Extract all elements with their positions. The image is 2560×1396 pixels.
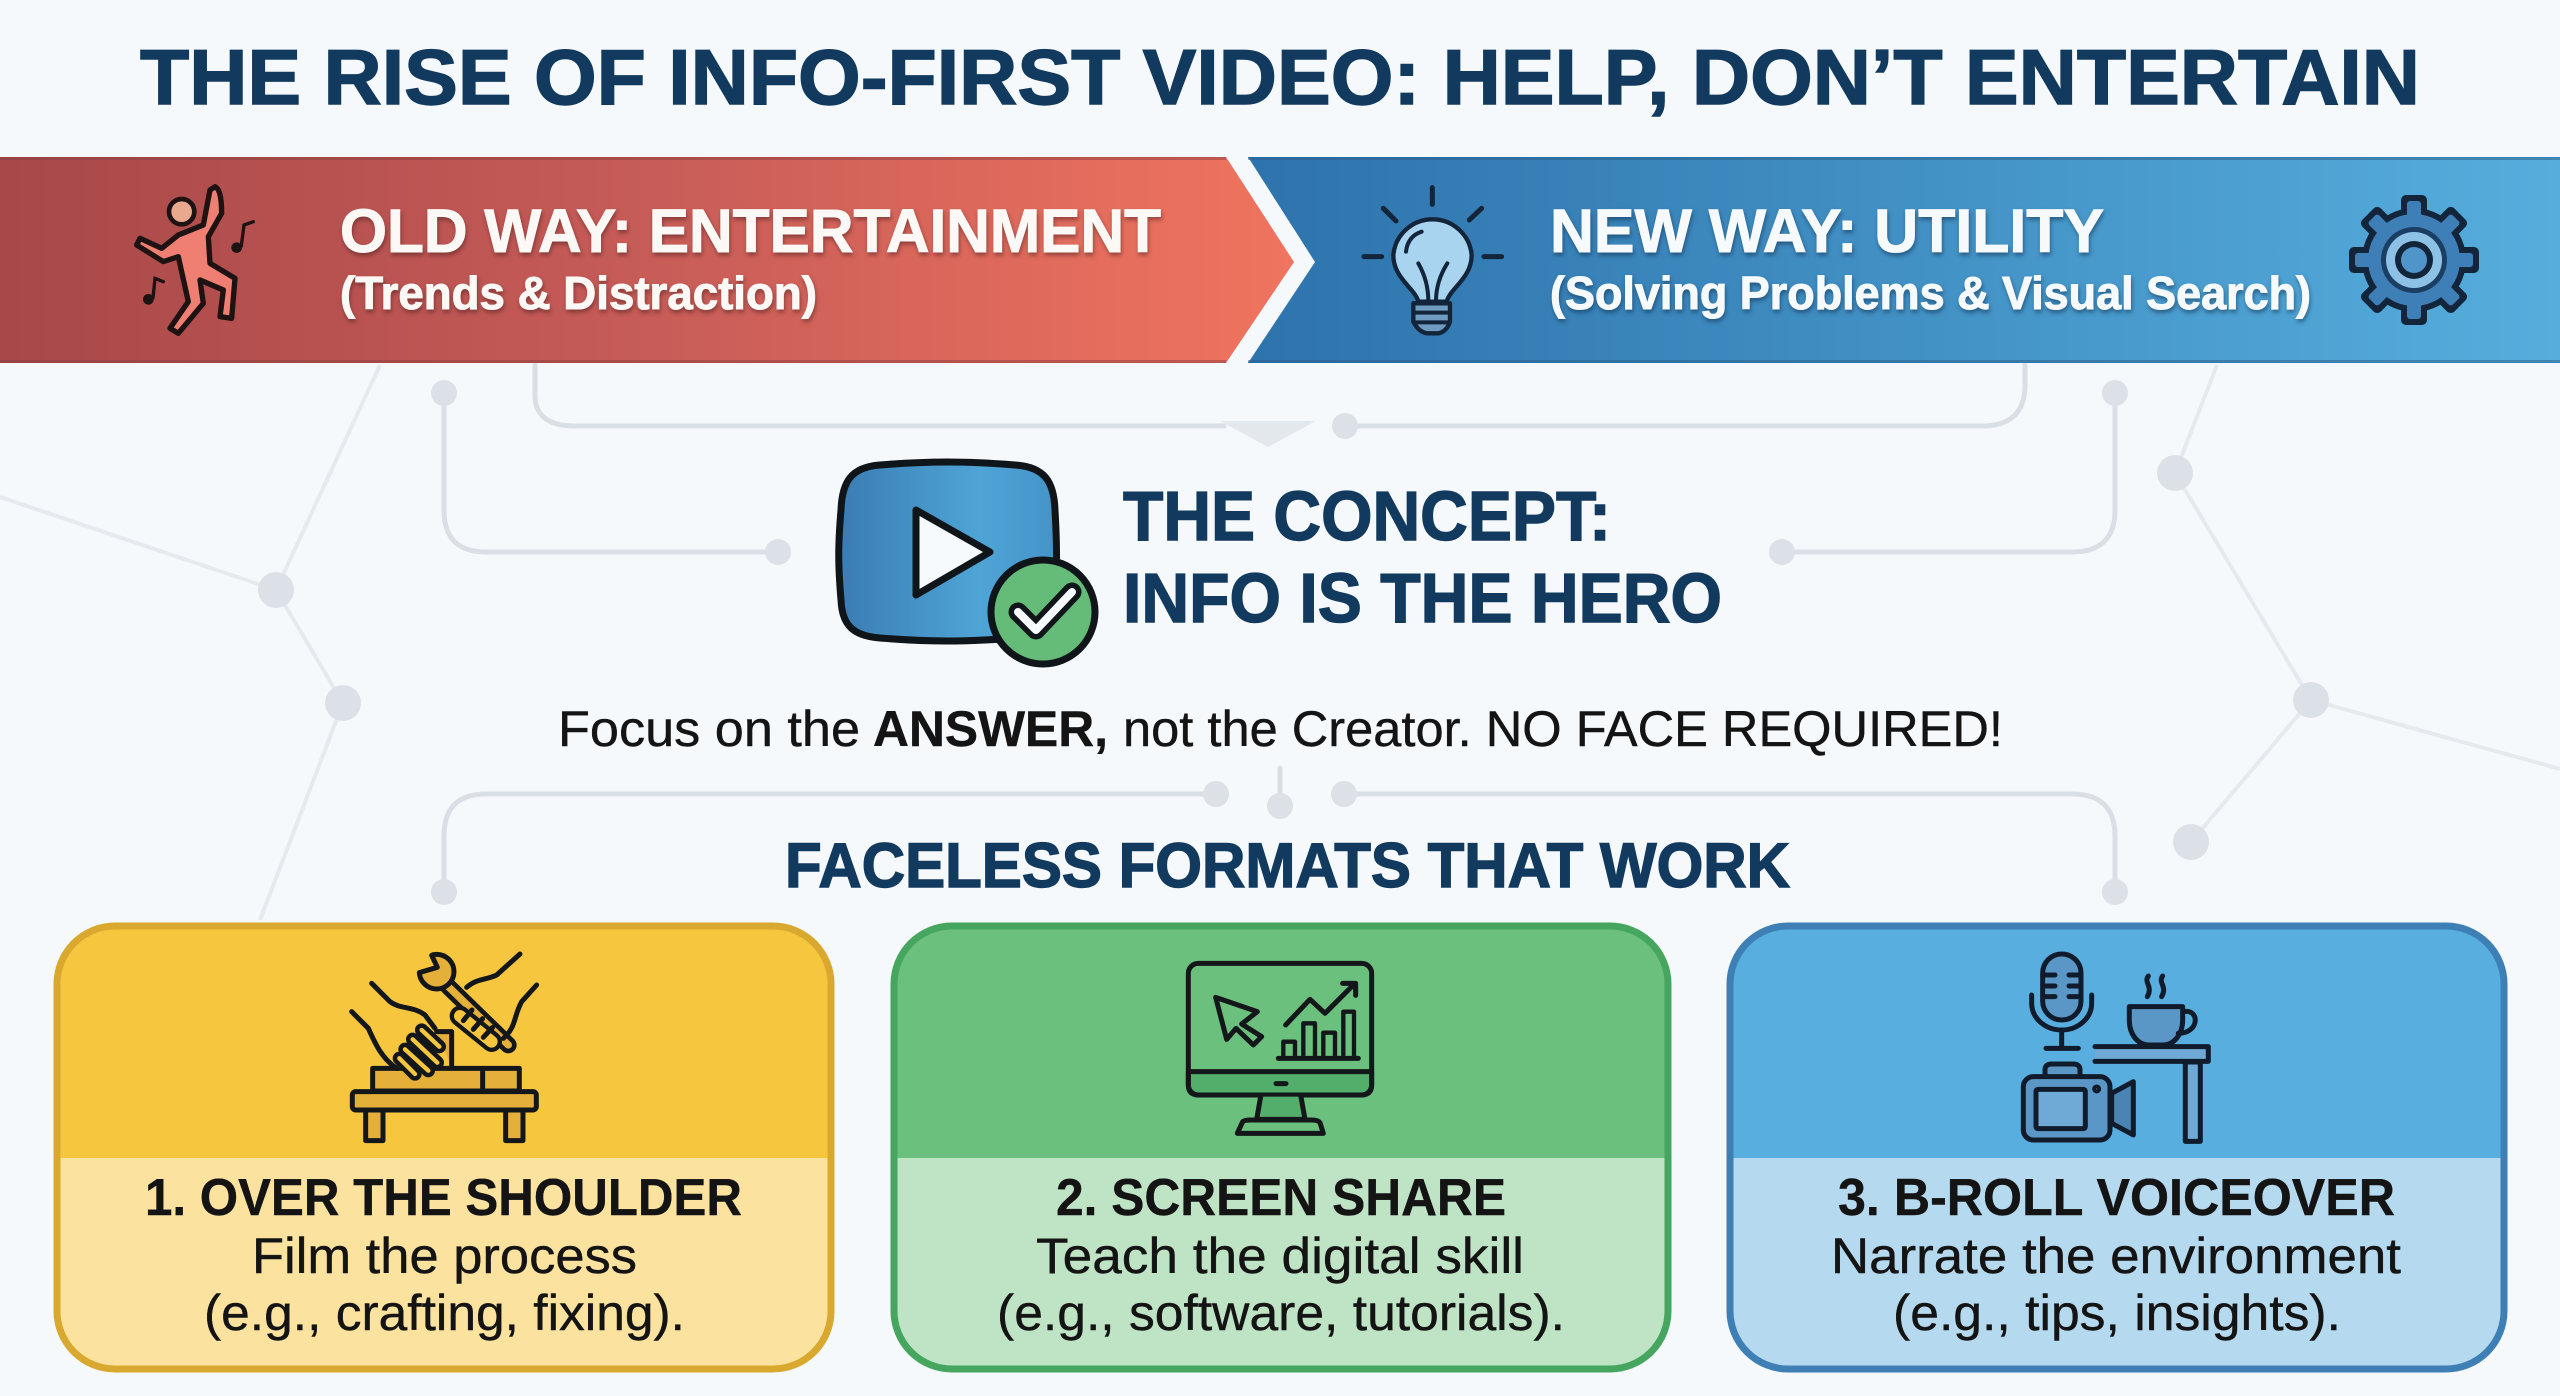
card 1 description: (e.g., crafting, fixing).: [204, 1285, 685, 1341]
new way subheading: (Solving Problems & Visual Search): [1550, 267, 2311, 319]
card 1 description: [204, 1228, 685, 1341]
card 3 heading: 3. B-ROLL VOICEOVER: [1838, 1169, 2395, 1227]
panel: screen share card: [894, 926, 1668, 1369]
concept heading: INFO IS THE HERO: [1123, 559, 1722, 637]
panel: old way banner: [0, 157, 1294, 363]
icon: gear: [2349, 195, 2479, 325]
panel: b-roll voiceover card: [1730, 926, 2504, 1369]
old way subheading: (Trends & Distraction): [340, 267, 817, 319]
concept description: [558, 701, 2003, 757]
panel: over the shoulder card: [57, 926, 831, 1369]
icon: video play with check: [839, 462, 1095, 664]
card 2 description: (e.g., software, tutorials).: [997, 1285, 1565, 1341]
section heading: FACELESS FORMATS THAT WORK: [785, 831, 1790, 901]
card 2 heading: 2. SCREEN SHARE: [1056, 1169, 1506, 1227]
background network lines and nodes: [0, 365, 2560, 920]
title: THE RISE OF INFO-FIRST VIDEO: HELP, DON’T ENTERTAIN: [140, 33, 2420, 121]
icon: light bulb: [1364, 188, 1502, 333]
panel: new way banner: [1248, 157, 2560, 363]
card 3 description: (e.g., tips, insights).: [1893, 1285, 2341, 1341]
concept heading: THE CONCEPT:: [1123, 477, 1611, 555]
card 1 heading: 1. OVER THE SHOULDER: [145, 1169, 742, 1227]
icon: hands, wrench and workbench: [352, 951, 537, 1141]
card 2 description: [997, 1228, 1565, 1341]
icon: monitor with cursor and chart: [1188, 963, 1372, 1133]
concept description: not the Creator. NO FACE REQUIRED!: [1123, 701, 2003, 757]
icon: microphone, camera, coffee on desk: [2023, 954, 2208, 1141]
old way heading: OLD WAY: ENTERTAINMENT: [340, 197, 1161, 265]
card 1 description: Film the process: [252, 1228, 637, 1284]
new way heading: NEW WAY: UTILITY: [1550, 197, 2104, 265]
concept description: Focus on the: [558, 701, 860, 757]
card 2 description: Teach the digital skill: [1036, 1228, 1524, 1284]
concept heading: [1123, 477, 1722, 637]
card 3 description: [1831, 1228, 2401, 1341]
concept description: ANSWER,: [873, 701, 1108, 757]
card 3 description: Narrate the environment: [1831, 1228, 2401, 1284]
icon: dancer with music notes: [137, 187, 253, 333]
